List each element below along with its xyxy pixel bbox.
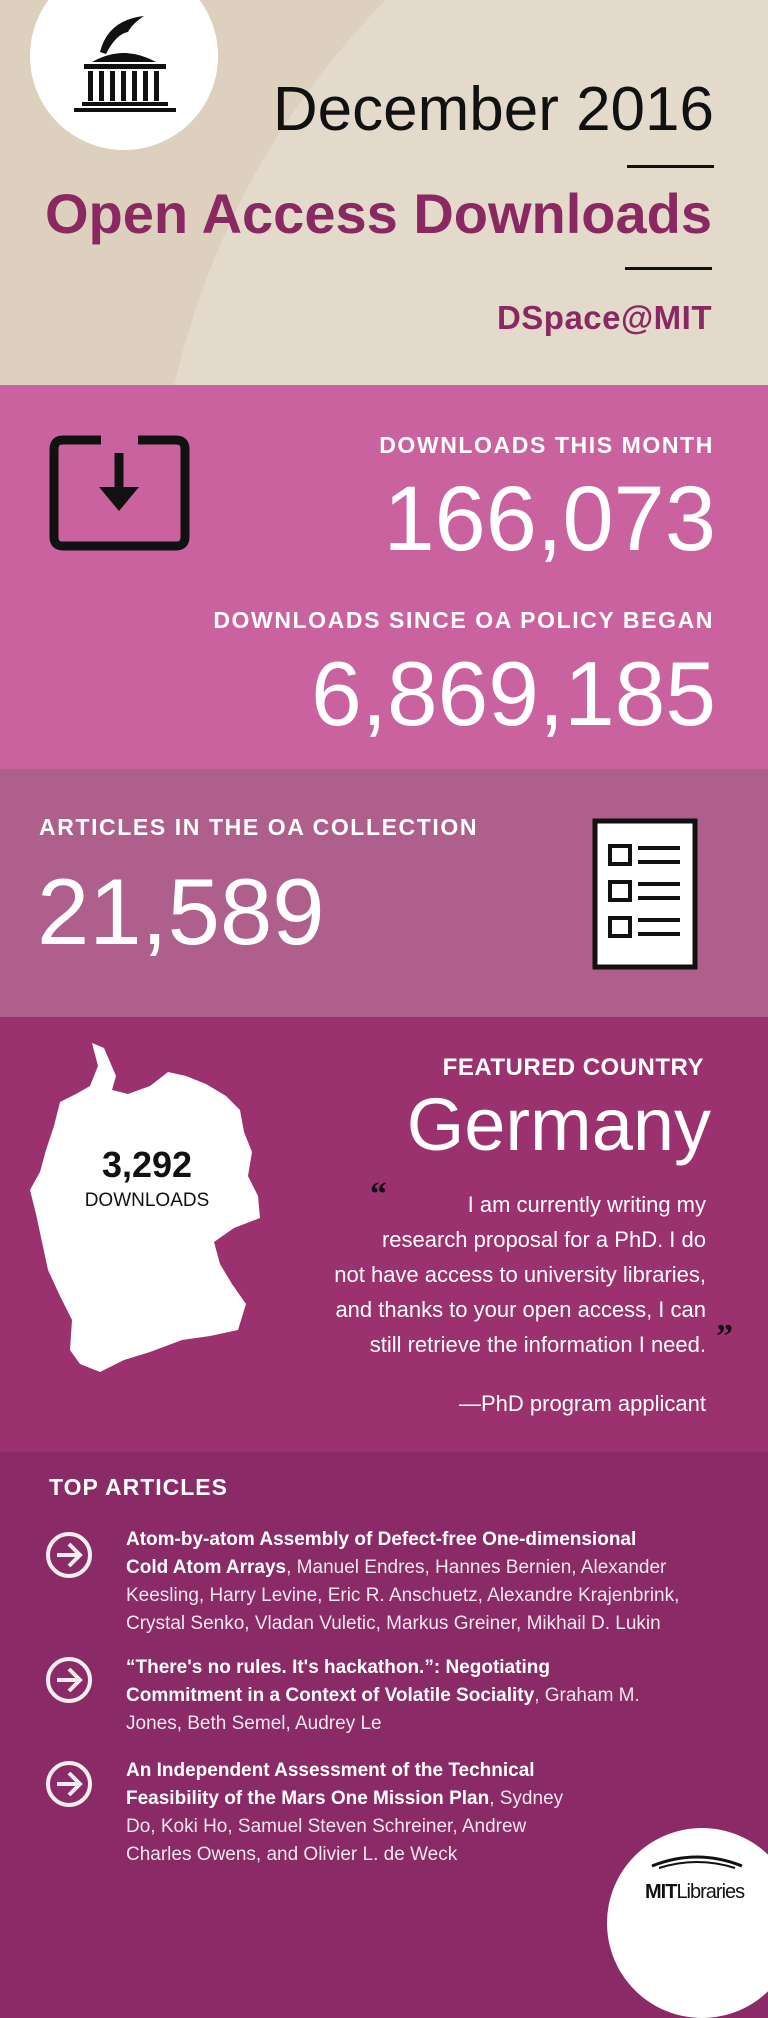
text: DOWNLOADS	[85, 1190, 209, 1211]
article 1: Atom-by-atom Assembly of Defect-free One-dimensional	[126, 1529, 636, 1550]
text: ”	[716, 1318, 733, 1355]
attribution: —PhD program applicant	[459, 1391, 706, 1416]
text: 166,073	[383, 468, 716, 570]
article 3: Feasibility of the Mars One Mission Plan, Sydney	[126, 1788, 563, 1809]
icon: document	[592, 818, 698, 970]
stat: Germany downloads: 3,292	[102, 1144, 192, 1185]
title: Open Access Downloads	[45, 182, 712, 245]
quote: and thanks to your open access, I can	[335, 1297, 706, 1322]
logo: MIT Libraries: MITLibraries	[645, 1881, 744, 1903]
article 3: Do, Koki Ho, Samuel Steven Schreiner, Andrew	[126, 1816, 526, 1837]
article 2: Jones, Beth Semel, Audrey Le	[126, 1713, 382, 1734]
icon: arrow 2	[46, 1657, 92, 1703]
article 2: “There's no rules. It's hackathon.”: Negotiating	[126, 1657, 550, 1678]
stat: downloads since policy: DOWNLOADS SINCE OA POLICY BEGAN	[213, 607, 714, 633]
heading: featured country: FEATURED COUNTRY	[443, 1054, 704, 1081]
icon: arrow 1	[46, 1532, 92, 1578]
panel: top articles: TOP ARTICLES	[49, 1474, 228, 1500]
quote: I am currently writing my	[468, 1192, 706, 1217]
map: Germany	[30, 1043, 260, 1372]
article 3: Charles Owens, and Olivier L. de Weck	[126, 1844, 457, 1865]
panel: featured country	[0, 1017, 768, 1452]
article 1: Cold Atom Arrays, Manuel Endres, Hannes Bernien, Alexander	[126, 1557, 666, 1578]
text: 21,589	[37, 859, 325, 964]
panel: downloads	[0, 385, 768, 769]
quote: research proposal for a PhD. I do	[382, 1227, 706, 1252]
quote	[334, 1192, 706, 1357]
quote: still retrieve the information I need.	[370, 1332, 706, 1357]
quote: not have access to university libraries,	[334, 1262, 706, 1287]
article 1	[126, 1529, 679, 1634]
text: “	[370, 1176, 387, 1213]
icon: arrow 3	[46, 1761, 92, 1807]
logo: MIT Libraries	[607, 1828, 768, 2018]
article 1: Crystal Senko, Vladan Vuletic, Markus Greiner, Mikhail D. Lukin	[126, 1613, 661, 1634]
icon: download	[50, 436, 190, 550]
article 2: Commitment in a Context of Volatile Sociality, Graham M.	[126, 1685, 640, 1706]
stat: articles count: ARTICLES IN THE OA COLLECTION	[39, 814, 478, 840]
heading: date: December 2016	[273, 75, 714, 144]
panel: articles	[0, 769, 768, 1017]
article 1: Keesling, Harry Levine, Eric R. Anschuetz, Alexandre Krajenbrink,	[126, 1585, 679, 1606]
logo: MIT dome	[30, 0, 218, 150]
article 2	[126, 1657, 640, 1734]
stat: downloads this month: DOWNLOADS THIS MONTH	[379, 432, 714, 458]
article 3	[126, 1760, 564, 1865]
text: 6,869,185	[311, 644, 716, 745]
article 3: An Independent Assessment of the Technical	[126, 1760, 535, 1781]
header panel	[0, 0, 768, 385]
subtitle: DSpace@MIT	[497, 299, 712, 336]
text: Germany	[407, 1083, 711, 1166]
